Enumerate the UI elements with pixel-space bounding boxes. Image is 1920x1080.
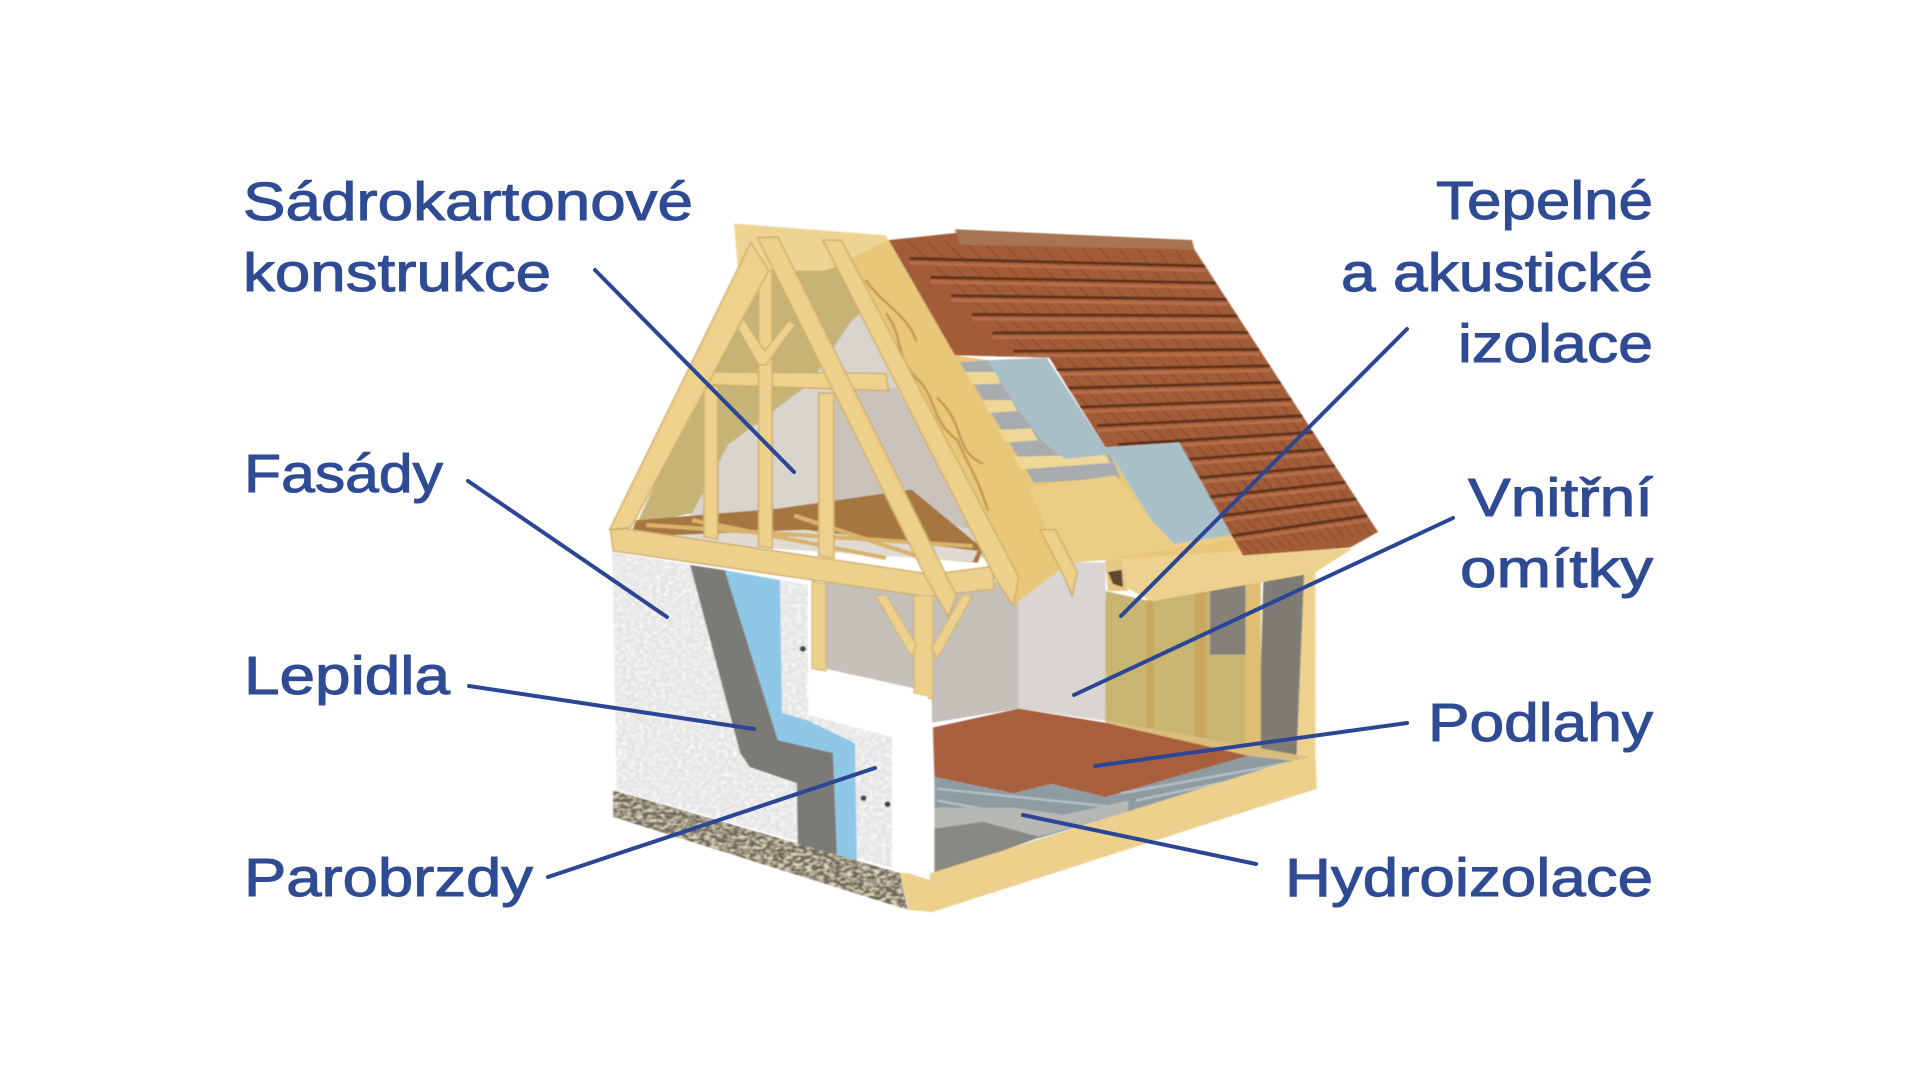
stone plinth <box>613 790 908 910</box>
facade render <box>612 552 892 868</box>
leader: Fasády <box>468 481 667 617</box>
grey adhesive layer <box>690 565 837 857</box>
label: Vnitřní omítky <box>1460 468 1653 599</box>
attic insulation <box>636 247 866 525</box>
floor backing <box>1105 720 1315 817</box>
bottom beam <box>900 756 1317 912</box>
label: Hydroizolace: Hydroizolace <box>1285 848 1653 908</box>
waterproofing mesh <box>934 801 1128 837</box>
white insulation board <box>808 670 930 880</box>
leader: Lepidla <box>469 686 754 729</box>
leader: Parobrzdy <box>548 768 875 877</box>
ridge cap <box>955 229 1195 249</box>
roof battens <box>960 360 1238 563</box>
OSB roof sheathing <box>845 240 1243 605</box>
floor boards <box>933 709 1248 797</box>
right gable wall back <box>1105 591 1248 753</box>
eave post and notch <box>1105 559 1128 591</box>
label: Fasády: Fasády <box>244 444 443 504</box>
label: Lepidla: Lepidla <box>244 646 451 706</box>
label: Tepelné a akustické izolace: Tepelné <box>1436 171 1653 231</box>
roof membrane <box>988 358 1235 544</box>
label: Podlahy: Podlahy <box>1428 693 1653 753</box>
label: Vnitřní omítky: omítky <box>1460 539 1653 599</box>
leader: Podlahy <box>1095 723 1407 766</box>
wall studs and openings <box>1146 571 1315 763</box>
floor underlay <box>934 756 1297 838</box>
label: Sádrokartonové konstrukce <box>243 172 693 303</box>
attic floor <box>631 490 983 563</box>
roof tiles <box>889 233 1378 556</box>
leader: Tepelné a akustické izolace <box>1121 329 1407 616</box>
front post and braces <box>812 582 973 699</box>
tie beam <box>611 529 994 597</box>
label: Sádrokartonové konstrukce: konstrukce <box>243 243 551 303</box>
right rafters <box>757 237 1077 617</box>
fastening dowels <box>800 646 891 807</box>
label: Tepelné a akustické izolace: a akustické <box>1341 243 1653 303</box>
leader lines <box>468 270 1453 877</box>
blue mesh layer <box>725 570 857 863</box>
label: Sádrokartonové konstrukce: Sádrokartonové <box>243 172 693 232</box>
label: Parobrzdy: Parobrzdy <box>244 848 533 908</box>
label: Tepelné a akustické izolace <box>1341 171 1653 374</box>
gable timber frame <box>610 242 889 558</box>
attic interior panels <box>692 323 978 530</box>
fascia <box>1121 549 1353 601</box>
illustration: cutaway house <box>610 224 1378 912</box>
attic back wall <box>682 261 988 558</box>
concrete slab <box>934 819 1070 876</box>
leader: Hydroizolace <box>1023 815 1256 864</box>
leader: Sádrokartonové konstrukce <box>595 270 794 472</box>
label: Vnitřní omítky: Vnitřní <box>1468 468 1653 528</box>
leader: Vnitřní omítky <box>1074 518 1453 695</box>
label: Tepelné a akustické izolace: izolace <box>1458 314 1653 374</box>
interior walls <box>825 563 1105 723</box>
ridge beam <box>734 224 891 271</box>
